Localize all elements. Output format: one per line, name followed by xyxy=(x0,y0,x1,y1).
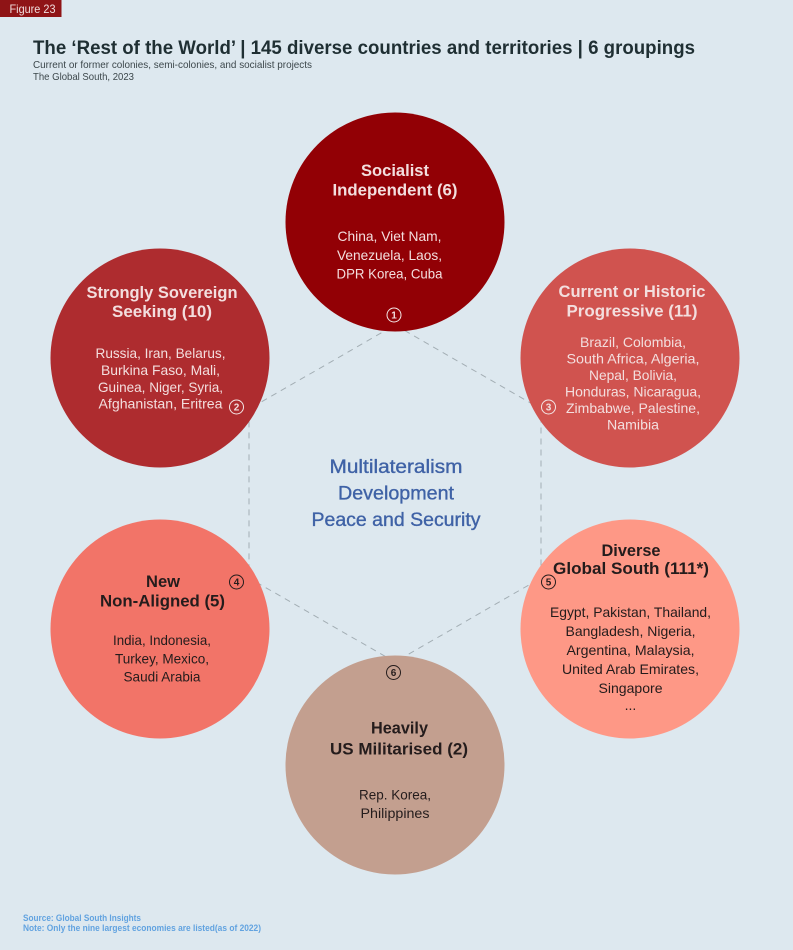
figure tag xyxy=(0,0,62,17)
badge 2: 2 xyxy=(234,402,240,414)
panel: current or historic progressive: Zimbabwe, Palestine, xyxy=(566,400,700,416)
title: The ‘Rest of the World’ | 145 diverse countries and territories | 6 groupings xyxy=(33,37,695,59)
source note: Source: Global South Insights xyxy=(23,913,141,923)
panel: heavily us militarised: US Militarised (2) xyxy=(330,740,468,758)
panel: diverse global south: Singapore xyxy=(598,680,663,696)
panel: strongly sovereign seeking: Burkina Faso, Mali, xyxy=(101,362,220,378)
panel: diverse global south: United Arab Emirates, xyxy=(562,661,699,677)
badge 2 xyxy=(230,400,244,414)
badge 5 xyxy=(542,575,556,589)
panel: socialist independent: Venezuela, Laos, xyxy=(337,247,442,263)
panel: new non-aligned: Saudi Arabia xyxy=(124,668,201,684)
panel: current or historic progressive: South Africa, Algeria, xyxy=(566,350,700,366)
panel: diverse global south xyxy=(520,520,740,738)
subtitle: Current or former colonies, semi-colonies, and socialist projects xyxy=(33,59,312,71)
panel: diverse global south: Argentina, Malaysia, xyxy=(566,642,694,658)
subtitle: The Global South, 2023 xyxy=(33,71,134,83)
panel: socialist independent: Socialist xyxy=(361,162,429,180)
panel: strongly sovereign seeking: Russia, Iran, Belarus, xyxy=(96,345,226,361)
panel: current or historic progressive: Honduras, Nicaragua, xyxy=(565,384,701,400)
badge 3: 3 xyxy=(546,402,552,414)
panel: strongly sovereign seeking: Guinea, Niger, Syria, xyxy=(98,379,223,395)
panel: new non-aligned: Non-Aligned (5) xyxy=(100,592,225,610)
panel: heavily us militarised: Philippines xyxy=(360,805,430,821)
panel: diverse global south: ... xyxy=(625,697,636,713)
panel: strongly sovereign seeking: Afghanistan, Eritrea xyxy=(98,396,223,412)
panel: socialist independent xyxy=(286,112,504,332)
panel: current or historic progressive: Namibia xyxy=(607,416,659,432)
subtitle xyxy=(33,59,312,83)
panel: current or historic progressive: Nepal, Bolivia, xyxy=(589,367,677,383)
panel: new non-aligned: India, Indonesia, xyxy=(113,632,211,648)
panel: new non-aligned xyxy=(50,520,270,738)
panel: current or historic progressive: Current or Historic xyxy=(558,283,706,301)
panel: new non-aligned: New xyxy=(146,573,180,591)
panel: diverse global south: Bangladesh, Nigeria, xyxy=(566,623,696,639)
badge 5: 5 xyxy=(546,578,552,588)
central text: Peace and Security xyxy=(312,510,481,531)
badge 4 xyxy=(230,575,244,589)
dashed hexagon connector xyxy=(249,325,541,662)
panel: socialist independent: China, Viet Nam, xyxy=(338,228,442,244)
panel: new non-aligned: Turkey, Mexico, xyxy=(115,650,209,666)
panel: current or historic progressive: Progressive (11) xyxy=(566,302,698,320)
central text xyxy=(312,457,481,531)
panel: strongly sovereign seeking xyxy=(50,248,270,468)
panel: strongly sovereign seeking: Seeking (10) xyxy=(112,303,212,321)
panel: current or historic progressive: Brazil, Colombia, xyxy=(580,334,686,350)
panel: heavily us militarised: Heavily xyxy=(371,720,429,738)
panel: heavily us militarised xyxy=(286,656,504,874)
badge 3 xyxy=(542,400,556,414)
panel: diverse global south: Egypt, Pakistan, Thailand, xyxy=(550,604,711,620)
source note: Note: Only the nine largest economies are listed(as of 2022) xyxy=(23,923,261,933)
panel: socialist independent: DPR Korea, Cuba xyxy=(336,266,443,282)
central text: Multilateralism xyxy=(330,457,462,478)
badge 1: 1 xyxy=(391,310,397,322)
panel: current or historic progressive xyxy=(520,248,740,468)
badge 6: 6 xyxy=(391,668,397,679)
badge 1 xyxy=(387,308,401,322)
panel: socialist independent: Independent (6) xyxy=(332,182,458,200)
figure tag: Figure 23 xyxy=(10,2,56,16)
panel: diverse global south: Global South (111*) xyxy=(553,560,709,578)
source note xyxy=(23,913,261,933)
panel: strongly sovereign seeking: Strongly Sovereign xyxy=(86,284,238,302)
panel: diverse global south: Diverse xyxy=(602,542,660,560)
badge 6 xyxy=(386,666,400,680)
panel: heavily us militarised: Rep. Korea, xyxy=(359,786,431,802)
central text: Development xyxy=(338,484,455,504)
badge 4: 4 xyxy=(234,578,240,588)
